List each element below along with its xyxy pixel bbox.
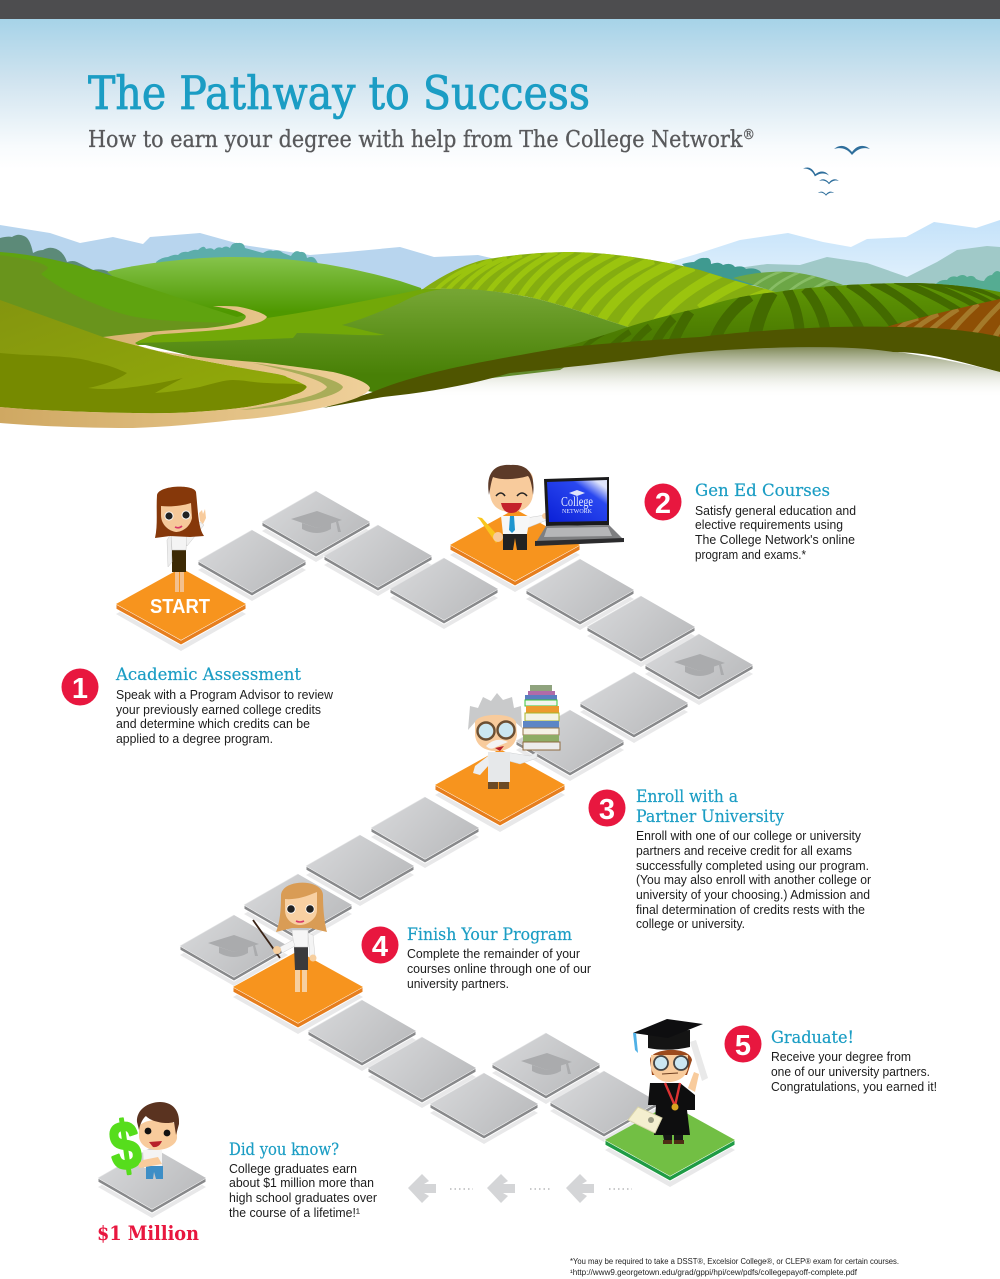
number badge 4: 4: [372, 931, 388, 963]
step 3 text: successfully completed using our program.: [636, 859, 869, 873]
winding road: [0, 306, 370, 428]
step 3 block: [588, 787, 871, 931]
character: graduate: [633, 1019, 703, 1144]
step 5 heading: Graduate!: [771, 1028, 854, 1048]
brown field: [886, 299, 1000, 337]
tile with cap: [645, 634, 753, 705]
step 4 text: Complete the remainder of your: [407, 947, 580, 961]
character: man with pencil and laptop: [477, 465, 548, 550]
did you know text: high school graduates over: [229, 1191, 377, 1205]
step 2 text: Satisfy general education and: [695, 504, 856, 518]
icon: laptop: [535, 477, 624, 546]
mountains right: [670, 220, 1000, 310]
small back field: [733, 272, 843, 292]
step 1 text: applied to a degree program.: [116, 732, 273, 746]
character: boy with dollar sign: [105, 1102, 179, 1186]
step 5 text: one of our university partners.: [771, 1065, 930, 1079]
step 1 text: your previously earned college credits: [116, 703, 321, 717]
tile with cap: [262, 491, 370, 562]
step 4 heading: Finish Your Program: [407, 925, 572, 945]
number badge 1: 1: [72, 673, 88, 705]
front middle hill: [137, 289, 628, 392]
fade under band: [420, 345, 1000, 398]
did you know heading: Did you know?: [229, 1140, 339, 1160]
dark stripes: [583, 283, 1000, 346]
did you know text: the course of a lifetime!¹: [229, 1206, 360, 1220]
step 1 text: and determine which credits can be: [116, 717, 310, 731]
step 2 text: The College Network's online: [695, 533, 855, 547]
field stripes: [433, 250, 780, 329]
step 4 text: university partners.: [407, 977, 509, 991]
left back hill: [0, 252, 270, 345]
dark trees: [143, 277, 237, 325]
number badge 3: [588, 790, 626, 826]
step 3 heading: Partner University: [636, 807, 784, 827]
step 5 text: Receive your degree from: [771, 1050, 911, 1064]
character: teacher with pointer: [253, 883, 327, 992]
icon: diploma: [628, 1040, 708, 1133]
step 1 heading: Academic Assessment: [115, 665, 301, 685]
did you know block: [229, 1140, 377, 1220]
icon: laptop: NETWORK: [562, 509, 593, 515]
tile with cap: [180, 915, 288, 986]
dark foreground band: [323, 327, 1000, 408]
number badge 2: [644, 484, 682, 520]
light green meadow: [137, 289, 443, 343]
did you know text: about $1 million more than: [229, 1176, 374, 1190]
step 1 block: [62, 665, 334, 746]
number badge 5: [724, 1026, 762, 1062]
number badge 5: 5: [735, 1030, 751, 1062]
green finish tile: [605, 1104, 735, 1187]
start label: START: [150, 596, 210, 618]
step 4 text: courses online through one of our: [407, 962, 591, 976]
number badge 2: 2: [655, 488, 671, 520]
title: The Pathway to Success: [88, 66, 590, 120]
number badge 1: [62, 668, 98, 706]
did you know text: College graduates earn: [229, 1162, 357, 1176]
character: professor holding books: [468, 693, 537, 789]
icon: birds: [802, 146, 870, 196]
trees left: [0, 235, 140, 310]
million label: $1 Million: [97, 1221, 199, 1245]
tile with cap: [492, 1033, 600, 1104]
step 3 text: partners and receive credit for all exams: [636, 844, 852, 858]
step 2 text: program and exams.*: [695, 548, 806, 562]
step 5 block: [724, 1026, 937, 1094]
sky gradient: [0, 19, 1000, 169]
step 3 text: final determination of credits rests with the: [636, 903, 865, 917]
teal mountains right: [738, 246, 1000, 310]
trees right: [935, 271, 1000, 305]
step 5 text: Congratulations, you earned it!: [771, 1080, 937, 1094]
left foreground hill: [0, 300, 307, 413]
step 3 text: university of your choosing.) Admission and: [636, 888, 870, 902]
step 4 block: [362, 925, 591, 991]
panel: game board tiles: [98, 491, 753, 1218]
left foreground shade: [0, 353, 307, 413]
road centre strip: [240, 363, 343, 410]
landscape illustration: [0, 220, 1000, 428]
icon: laptop: College: [561, 495, 593, 510]
arrows back to start: [408, 1174, 632, 1203]
icon: stack of books: [523, 685, 560, 750]
step 3 text: (You may also enroll with another college or: [636, 873, 871, 887]
number badge 3: 3: [599, 794, 615, 826]
step 3 text: Enroll with one of our college or university: [636, 829, 862, 843]
footnotes: ¹http://www9.georgetown.edu/grad/gppi/hpi/cew/pdfs/collegepayoff-complete.pdf: [570, 1268, 858, 1277]
mountains left: [0, 225, 504, 330]
footnotes: *You may be required to take a DSST®, Excelsior College®, or CLEP® exam for certain courses.: [570, 1257, 899, 1266]
top bar: [0, 0, 1000, 19]
step 2 block: [644, 481, 856, 562]
character: boy with dollar sign: $: [105, 1106, 145, 1186]
number badge 4: [362, 926, 398, 964]
back middle hill: [107, 257, 430, 340]
step 3 text: college or university.: [636, 917, 745, 931]
step 2 heading: Gen Ed Courses: [695, 481, 830, 501]
subtitle: How to earn your degree with help from The College Network: [88, 127, 815, 153]
step 3 heading: Enroll with a: [636, 787, 738, 807]
left back hill shade: [0, 255, 233, 345]
step 1 text: Speak with a Program Advisor to review: [116, 688, 334, 702]
trees center right: [682, 258, 770, 285]
striped field hill: [423, 252, 777, 327]
character: advisor woman waving: [155, 487, 206, 592]
dark striped hill: [560, 283, 1000, 350]
step 2 text: elective requirements using: [695, 518, 843, 532]
subtitle: ®: [742, 127, 755, 143]
trees teal: [156, 243, 323, 302]
